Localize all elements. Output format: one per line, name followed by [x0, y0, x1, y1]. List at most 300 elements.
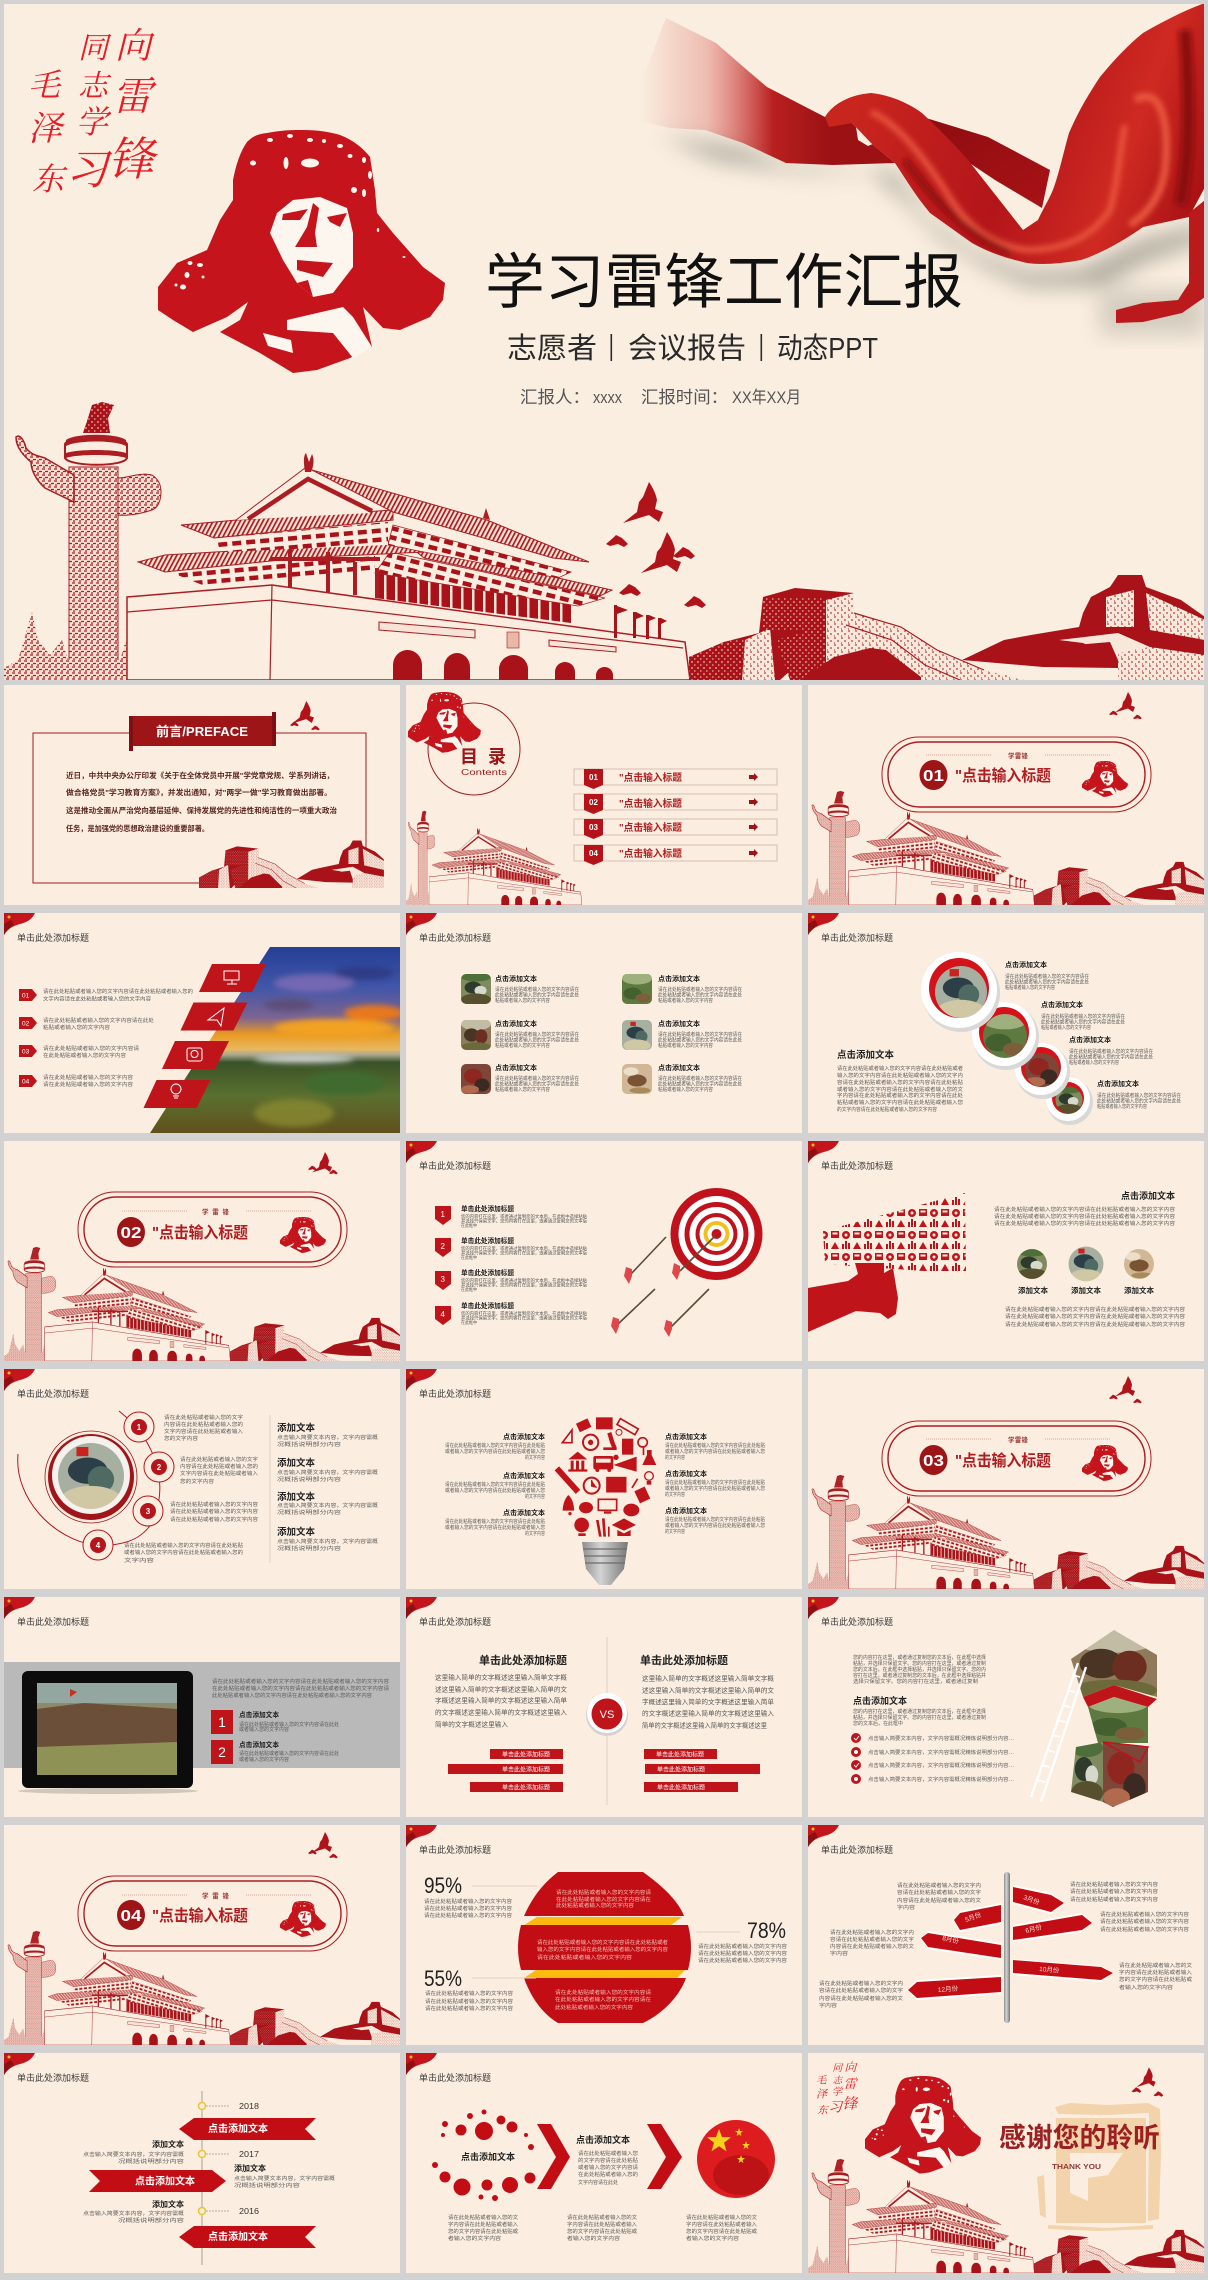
stat 95%	[424, 1873, 537, 1919]
right text 2	[665, 1469, 765, 1498]
slide heading: 单击此处添加标题	[17, 1388, 89, 1399]
photo circle 3: 添加文本	[1124, 1285, 1154, 1295]
left text 3: 点击添加文本	[503, 1508, 545, 1517]
item 4 text: 粘贴或者输入您的文字内容	[1097, 1103, 1147, 1110]
left text 2: 或者输入您的文字内容请在此处粘贴或者输入您	[445, 1487, 545, 1494]
text group D: 容请在此处粘贴或者输入您的文字	[830, 1936, 914, 1943]
text 1: 况概括说明部分内容	[118, 2158, 184, 2165]
bottom text 2	[567, 2214, 637, 2242]
section capsule	[882, 737, 1151, 812]
bottom text: 请在此处粘贴或者输入您的文字内容请在此处粘贴或者输入您的文字内容	[1005, 1306, 1185, 1313]
left text 1: 的文字内容	[525, 1454, 545, 1461]
stat 78%: 请在此处粘贴或者输入您的文字内容	[698, 1950, 787, 1957]
portrait	[280, 1901, 326, 1937]
item 5: 粘贴或者输入您的文字内容	[495, 1086, 550, 1093]
doves	[1109, 1376, 1142, 1403]
list item 02: 粘贴或者输入您的文字内容	[43, 1024, 110, 1031]
left text 1: 或者输入您的文字内容请在此处粘贴或者输入您	[445, 1448, 545, 1455]
list item 1: 并选择只保留文字。您的内容打在这里，或者通过复制您的文本后	[461, 1218, 587, 1224]
contents row 04	[574, 845, 777, 865]
node 2	[144, 1452, 174, 1482]
right text 1	[665, 1432, 765, 1461]
section label: 学雷锋	[1008, 751, 1028, 760]
right list item 2: 况概括说明部分内容	[277, 1476, 341, 1483]
item 3: 粘贴或者输入您的文字内容	[495, 1042, 550, 1049]
year 2018: 2018	[239, 2102, 260, 2111]
list item 1: 在此框中	[461, 1222, 477, 1229]
presenter line: 汇报时间：	[641, 388, 728, 407]
upper text: 选择只保留文字。您的内容打在这里，或者通过复制	[853, 1678, 978, 1685]
right title: 单击此处添加标题	[640, 1653, 728, 1667]
bottom text 1: 您的文字内容请在此处粘贴或	[448, 2228, 518, 2235]
year 2017	[198, 2150, 260, 2159]
chevron 2	[647, 2124, 682, 2189]
item 1	[461, 974, 579, 1004]
section heading: "点击输入标题	[152, 1223, 248, 1242]
text 3: 添加文本	[152, 2199, 184, 2209]
title and text: 请在此处粘贴或者输入您的文字内容请在此处粘贴或者输入您的文字内容	[994, 1213, 1175, 1220]
title and text: 请在此处粘贴或者输入您的文字内容请在此处粘贴或者输入您的文字内容	[994, 1220, 1175, 1227]
item 1: 1	[218, 1714, 226, 1730]
right text 2: 请在此处粘贴或者输入您的文字内容请在此处粘贴	[665, 1479, 765, 1486]
item 2 text: 此处粘贴或者输入您的文字内容请在此处	[1041, 1018, 1125, 1026]
list item 04: 请在此处粘贴或者输入您的文字内容	[43, 1081, 133, 1088]
right body text: 简单的文字概述这里输入简单的文字概述这里	[642, 1720, 767, 1730]
sign 10月份: 10月份	[1039, 1964, 1060, 1975]
calligraphy inscription: 同	[78, 23, 112, 67]
right text 3: 或者输入您的文字内容请在此处粘贴或者输入您	[665, 1522, 765, 1529]
item 1: 粘贴或者输入您的文字内容	[495, 997, 550, 1004]
list item 01	[19, 988, 193, 1002]
year 2016: 2016	[239, 2207, 260, 2216]
list item 2: 2	[440, 1242, 446, 1251]
text group C: 请在此处粘贴或者输入您的文字内容	[1100, 1918, 1189, 1925]
item 4: 请在此处粘贴或者输入您的文字内容请在	[658, 1031, 742, 1038]
corner flag	[808, 1825, 839, 1847]
banner 3: 点击添加文本	[208, 2230, 268, 2243]
section heading: "点击输入标题	[955, 766, 1051, 785]
item 1 text	[1005, 960, 1089, 991]
list item 02	[19, 1017, 154, 1031]
item 1: 或者输入您的文字内容	[239, 1726, 289, 1733]
list item 1: 1	[440, 1210, 446, 1219]
upper text: 您的文本后，在此框中选择粘贴，并选择只保留文字。您的内	[853, 1666, 986, 1673]
left text 2: 的文字内容	[525, 1493, 545, 1500]
sign 8月份: 8月份	[942, 1933, 960, 1946]
item 1	[211, 1710, 339, 1734]
huabiao column	[406, 810, 435, 905]
flying doves	[606, 482, 706, 608]
VS badge: VS	[600, 1709, 614, 1721]
lower title and text: 粘贴，并选择只保留文字。您的内容打在这里，或者通过复制	[853, 1714, 986, 1721]
list item 03	[19, 1045, 139, 1059]
item 2 text	[1041, 1000, 1125, 1031]
left body text	[435, 1672, 568, 1728]
item 2 text: 请在此处粘贴或者输入您的文字内容请在	[1041, 1013, 1125, 1020]
portrait of Lei Feng	[158, 130, 445, 373]
bottom text 2: 请在此处粘贴或者输入您的文	[567, 2214, 637, 2221]
section number	[920, 1445, 948, 1475]
corner flag	[406, 1825, 437, 1847]
item 1: 请在此处粘贴或者输入您的文字内容请在	[495, 986, 579, 993]
item 4: 粘贴或者输入您的文字内容	[658, 1042, 713, 1049]
landmark scene	[808, 790, 1204, 905]
upper text: 粘贴，并选择只保留文字。您的内容打在这里，或者通过复制	[853, 1660, 986, 1667]
text 2: 添加文本	[234, 2163, 266, 2173]
right list item 3	[277, 1491, 378, 1516]
section number: 03	[923, 1453, 944, 1470]
sign 12月份: 12月份	[938, 1984, 959, 1994]
calligraphy inscription: 泽	[28, 101, 65, 150]
left text block: 的文字内容请在此处粘贴或者输入您的文字内容	[837, 1106, 937, 1113]
node 2: 2	[157, 1463, 162, 1472]
item 2: 或者输入您的文字内容	[239, 1756, 289, 1763]
bulb made of icons	[555, 1417, 656, 1537]
section number: 04	[120, 1908, 142, 1925]
right body text: 这里输入简单的文字概述这里输入简单文字概	[642, 1674, 775, 1682]
preface text: 做合格党员"学习教育方案》，并发出通知，对"两学一做"学习教育做出部署。	[66, 787, 332, 797]
stat 78%	[696, 1918, 787, 1964]
slide heading: 单击此处添加标题	[17, 1616, 89, 1627]
left text block: 请在此处粘贴或者输入您的文字内容请在此处粘贴或者	[837, 1065, 963, 1072]
panel: thank you slide	[808, 2053, 1204, 2273]
portrait	[1082, 761, 1128, 797]
item 3: 此处粘贴或者输入您的文字内容请在此处	[495, 1036, 579, 1044]
calligraphy: 学	[832, 2083, 844, 2098]
text 2: 点击输入简要文本内容，文字内容需概	[234, 2175, 335, 2182]
lower title and text: 点击添加文本	[853, 1695, 907, 1706]
right bars: 单击此处添加标题	[656, 1750, 704, 1758]
text 1: 您的文字内容	[164, 1435, 198, 1442]
sphere bottom segment: 请在此处粘贴或者输入您的文字内容请	[555, 1989, 651, 1996]
photo circle 3	[1124, 1249, 1154, 1295]
bullet 1: 点击输入简要文本内容，文字内容需概况精炼说明部分内容…	[868, 1735, 1014, 1742]
item 1: 请在此处粘贴或者输入您的文字内容请在此处	[239, 1721, 339, 1728]
circle 3	[1015, 1043, 1070, 1099]
calligraphy: 向	[845, 2059, 858, 2075]
text group D: 字内容	[830, 1950, 848, 1957]
bottom text 1	[448, 2214, 518, 2242]
stat 95%: 95%	[424, 1873, 462, 1898]
item 6: 点击添加文本	[658, 1063, 700, 1072]
right text 3: 的文字内容	[665, 1528, 685, 1535]
right list item 2: 点击输入简要文本内容，文字内容需概	[277, 1469, 378, 1476]
slide heading: 单击此处添加标题	[17, 2072, 89, 2083]
node 4	[83, 1530, 113, 1560]
item 5	[461, 1063, 579, 1094]
tile: bulb icon	[144, 1080, 210, 1108]
circle 2	[972, 1002, 1039, 1070]
divider	[269, 1415, 271, 1563]
band text	[212, 1678, 389, 1699]
left text block: 点击添加文本	[837, 1049, 895, 1061]
chevron 1	[537, 2124, 570, 2189]
ladder	[1031, 1663, 1086, 1802]
list item 03: 在此处粘贴或者输入您的文字内容	[43, 1052, 126, 1059]
text 2	[180, 1456, 258, 1485]
right list item 3: 添加文本	[277, 1491, 316, 1503]
list item 01: 01	[22, 992, 30, 1000]
text 3	[170, 1501, 258, 1523]
text group D: 请在此处粘贴或者输入您的文字内	[830, 1929, 914, 1936]
slide heading: 单击此处添加标题	[419, 1388, 491, 1399]
contents heading: Contents	[461, 767, 507, 777]
contents row 03: "点击输入标题	[619, 821, 682, 834]
list item 3: 3	[440, 1275, 446, 1284]
bottom text 3: 您的文字内容请在此处粘贴或	[686, 2228, 757, 2235]
contents row 02: 02	[589, 798, 598, 807]
contents row 04: 04	[589, 849, 598, 858]
panel: dots and flag slide	[406, 2053, 802, 2273]
list item 04	[19, 1074, 133, 1088]
tablet with painting	[18, 1671, 198, 1794]
grey band	[4, 1662, 400, 1768]
text 2: 况概括说明部分内容	[234, 2182, 300, 2189]
calligraphy inscription: 学	[76, 97, 112, 143]
left text 3: 或者输入您的文字内容请在此处粘贴或者输入您	[445, 1524, 545, 1531]
section heading: "点击输入标题	[152, 1906, 248, 1925]
calligraphy inscription	[28, 18, 158, 200]
subtitle: 会议报告	[628, 332, 746, 365]
panel: signpost slide	[808, 1825, 1204, 2045]
tile: paper plane icon	[180, 1002, 248, 1030]
right text 3: 点击添加文本	[665, 1506, 707, 1515]
item 1: 点击添加文本	[239, 1710, 279, 1719]
left text block: 输入您的文字内容请在此处粘贴或者输入您的文字内	[837, 1072, 963, 1079]
text 1	[164, 1414, 243, 1442]
banner 2: 点击添加文本	[135, 2174, 195, 2188]
huabiao column	[4, 402, 216, 680]
text 2: 请在此处粘贴或者输入您的文字	[180, 1456, 258, 1463]
node 4: 4	[96, 1541, 101, 1550]
circle 1	[921, 952, 1000, 1032]
text group E: 请在此处粘贴或者输入您的文	[1119, 1962, 1192, 1969]
photo circle 1	[1017, 1249, 1048, 1295]
bottom text 3: 请在此处粘贴或者输入您的文	[686, 2214, 757, 2221]
corner flag	[4, 913, 35, 935]
corner flag	[406, 2053, 437, 2075]
item 3 text: 点击添加文本	[1069, 1035, 1111, 1044]
stat 55%	[424, 1966, 536, 2012]
slide heading: 单击此处添加标题	[821, 1160, 893, 1171]
item 3 text: 请在此处粘贴或者输入您的文字内容请在	[1069, 1048, 1153, 1055]
sign 5月份	[953, 1903, 1001, 1932]
preface text: 近日，中共中央办公厅印发《关于在全体党员中开展"学党章党规、学系列讲话，	[66, 770, 334, 780]
list item 01: 文字内容请在此处粘贴或者输入您的文字内容	[43, 996, 151, 1002]
text 2: 内容请在此处粘贴或者输入您的	[180, 1463, 258, 1470]
panel: preface slide	[4, 685, 400, 905]
tile: camera icon	[162, 1041, 229, 1069]
lower title and text: 您的文本后，在此框中	[853, 1720, 903, 1727]
calligraphy inscription: 雷	[112, 65, 157, 122]
list item 4: 您的内容打在这里，或者通过复制您的文本后，在此框中选择粘贴	[461, 1310, 587, 1317]
text group A: 容请在此处粘贴或者输入您的文字	[897, 1889, 981, 1896]
left body text: 字概述这里输入简单的文字概述这里输入简单	[435, 1696, 568, 1704]
right body text: 的文字概述这里输入简单的文字概述这里输入	[642, 1708, 775, 1718]
yellow band 1	[524, 1917, 682, 1925]
banner 3	[179, 2226, 316, 2248]
sign 12月份	[907, 1975, 1001, 2000]
list item 4: 并选择只保留文字。您的内容打在这里，或者通过复制您的文本后	[461, 1314, 587, 1322]
text group F: 请在此处粘贴或者输入您的文字内	[819, 1980, 903, 1987]
item 2: 点击添加文本	[239, 1740, 279, 1749]
bottom text 1: 者输入您的文字内容	[448, 2235, 501, 2242]
left body text: 述这里输入简单的文字概述这里输入简单的文	[435, 1684, 568, 1694]
list item 03: 03	[22, 1048, 30, 1056]
slide heading: 单击此处添加标题	[17, 932, 89, 943]
bottom text 2: 您的文字内容请在此处粘贴或	[567, 2228, 637, 2235]
item 6: 此处粘贴或者输入您的文字内容请在此处	[658, 1080, 742, 1088]
panel: timeline slide	[4, 2053, 400, 2273]
sphere top segment: 请在此处粘贴或者输入您的文字内容请	[556, 1889, 651, 1896]
node 1	[124, 1412, 154, 1442]
item 2: 粘贴或者输入您的文字内容	[658, 997, 713, 1004]
middle text: 在此处粘贴或者输入您的	[578, 2171, 638, 2178]
preface banner: 前言/PREFACE	[156, 724, 248, 739]
text group E	[1119, 1962, 1192, 1991]
node 3	[133, 1496, 163, 1526]
contents row 03: 03	[589, 823, 598, 832]
panel: cover slide	[4, 4, 1204, 680]
left text block: 字内容请在此处粘贴或者输入您的文字内容请在此处	[837, 1092, 963, 1099]
right text 1: 的文字内容	[665, 1454, 685, 1461]
text 3: 况概括说明部分内容	[118, 2217, 184, 2224]
right list item 4: 况概括说明部分内容	[277, 1545, 341, 1552]
sphere top segment	[524, 1872, 684, 1916]
red silk ribbon	[623, 3, 1205, 335]
list item 3: 并选择只保留文字。您的内容打在这里，或者通过复制您的文本后	[461, 1282, 587, 1288]
Great Wall	[199, 840, 384, 888]
subtitle: 志愿者	[507, 332, 597, 365]
slide heading: 单击此处添加标题	[821, 932, 893, 943]
list item 4: 单击此处添加标题	[461, 1301, 514, 1310]
text group B: 请在此处粘贴或者输入您的文字内容	[1070, 1888, 1158, 1895]
section label: 学雷锋	[1008, 1435, 1028, 1444]
text group E: 字内容请在此处粘贴或者输入	[1119, 1969, 1192, 1976]
bottom text 1: 请在此处粘贴或者输入您的文	[448, 2214, 518, 2221]
right list item 4: 点击输入简要文本内容，文字内容需概	[277, 1538, 378, 1545]
item 1: 点击添加文本	[495, 974, 537, 983]
sphere middle segment	[518, 1925, 691, 1970]
portrait	[408, 692, 481, 753]
list item 2: 单击此处添加标题	[461, 1236, 514, 1245]
text group A: 内容请在此处粘贴或者输入您的文	[897, 1897, 981, 1904]
right body text: 字概述这里输入简单的文字概述这里输入简单	[642, 1697, 775, 1706]
bottom text: 请在此处粘贴或者输入您的文字内容请在此处粘贴或者输入您的文字内容	[1005, 1321, 1185, 1328]
middle text	[576, 2134, 638, 2186]
text group E: 您的文字内容请在此处粘贴或	[1119, 1976, 1192, 1983]
right text 2: 或者输入您的文字内容请在此处粘贴或者输入您	[665, 1485, 765, 1492]
right list item 1: 况概括说明部分内容	[277, 1441, 341, 1448]
item 2	[211, 1740, 339, 1764]
connecting arcs	[18, 1411, 160, 1545]
panel: tablet slide	[4, 1597, 400, 1817]
list item 4	[435, 1301, 587, 1326]
subtitle: 动态PPT	[777, 332, 878, 365]
slide heading: 单击此处添加标题	[419, 2072, 491, 2083]
sign 10月份	[1013, 1959, 1114, 1982]
stat 95%: 请在此处粘贴或者输入您的文字内容	[424, 1898, 512, 1905]
sphere bottom segment: 此处粘贴或者输入您的文字内容	[555, 2004, 633, 2011]
calligraphy: 习	[828, 2096, 844, 2115]
panel: six photo items slide	[406, 913, 802, 1133]
right list item 2: 添加文本	[277, 1457, 316, 1469]
megaphone hand	[808, 1263, 898, 1332]
contents row 02	[574, 794, 777, 814]
slide heading: 单击此处添加标题	[419, 1616, 491, 1627]
contents heading	[460, 747, 507, 777]
bottom text 2: 字内容请在此处粘贴或者输入	[567, 2221, 637, 2228]
lower title and text	[853, 1695, 986, 1727]
banner 1	[179, 2118, 316, 2140]
right text 1: 或者输入您的文字内容请在此处粘贴或者输入您	[665, 1448, 765, 1455]
title and text: 请在此处粘贴或者输入您的文字内容请在此处粘贴或者输入您的文字内容	[994, 1206, 1175, 1213]
right bars: 单击此处添加标题	[657, 1766, 705, 1774]
presenter line: 汇报人：	[520, 388, 590, 407]
stat 78%: 请在此处粘贴或者输入您的文字内容	[698, 1943, 787, 1950]
text 1: 请在此处粘贴或者输入您的文字	[164, 1414, 243, 1421]
panel: section 03	[808, 1369, 1204, 1589]
text group F: 容请在此处粘贴或者输入您的文字	[819, 1987, 903, 1994]
text group A: 字内容	[897, 1904, 915, 1911]
left bars: 单击此处添加标题	[502, 1750, 550, 1758]
bottom text 1: 字内容请在此处粘贴或者输入	[448, 2221, 518, 2228]
right list item 1	[277, 1422, 378, 1448]
sphere top segment: 在此处粘贴或者输入您的文字内容请在	[556, 1896, 651, 1903]
list item 2: 并选择只保留文字。您的内容打在这里，或者通过复制您的文本后	[461, 1250, 587, 1256]
item 4 text: 点击添加文本	[1097, 1079, 1139, 1088]
doves	[1132, 2067, 1163, 2097]
upper text: 容打在这里，或者通过复制您的文本后，在此框中选择粘贴并	[853, 1672, 986, 1679]
section label: 学雷锋	[202, 1207, 230, 1216]
preface banner	[129, 712, 276, 751]
contents heading: 目录	[460, 747, 506, 767]
text group D	[830, 1929, 914, 1957]
middle text: 请在此处粘贴或者输入您	[578, 2150, 638, 2157]
left text 1	[445, 1432, 545, 1461]
arrow 4	[664, 1289, 709, 1337]
list item 3: 在此框中	[461, 1286, 477, 1293]
list item 04: 请在此处粘贴或者输入您的文字内容	[43, 1074, 133, 1081]
portrait	[865, 2076, 981, 2174]
text group A	[897, 1882, 981, 1911]
item 6: 请在此处粘贴或者输入您的文字内容请在	[658, 1075, 742, 1082]
contents row 04: "点击输入标题	[619, 847, 682, 860]
thank you title: 感谢您的聆听	[999, 2122, 1160, 2153]
slide heading: 单击此处添加标题	[821, 1616, 893, 1627]
arrow 2	[624, 1237, 666, 1284]
section number: 02	[120, 1225, 142, 1242]
calligraphy: 同	[832, 2060, 844, 2074]
centre line	[606, 1637, 608, 1805]
item 6	[622, 1063, 742, 1094]
left text 3	[445, 1508, 545, 1537]
text group C: 请在此处粘贴或者输入您的文字内容	[1100, 1911, 1189, 1918]
list item 04: 04	[22, 1078, 30, 1086]
slide heading: 单击此处添加标题	[419, 1844, 491, 1855]
sphere middle segment: 请在此处粘贴或者输入您的文字内容	[537, 1954, 632, 1961]
photo circle 1: 添加文本	[1018, 1285, 1048, 1295]
item 1 text: 请在此处粘贴或者输入您的文字内容请在	[1005, 973, 1089, 980]
text 2: 文字内容请在此处粘贴或者输入	[180, 1470, 258, 1477]
left text 2	[445, 1471, 545, 1500]
panel: photo list slide	[4, 913, 400, 1133]
item 1: 此处粘贴或者输入您的文字内容请在此处	[495, 992, 579, 998]
calligraphy: 志	[832, 2072, 844, 2086]
sign 6月份: 6月份	[1024, 1922, 1043, 1935]
text 4: 文字内容	[124, 1557, 154, 1564]
left text 1: 点击添加文本	[503, 1432, 545, 1441]
